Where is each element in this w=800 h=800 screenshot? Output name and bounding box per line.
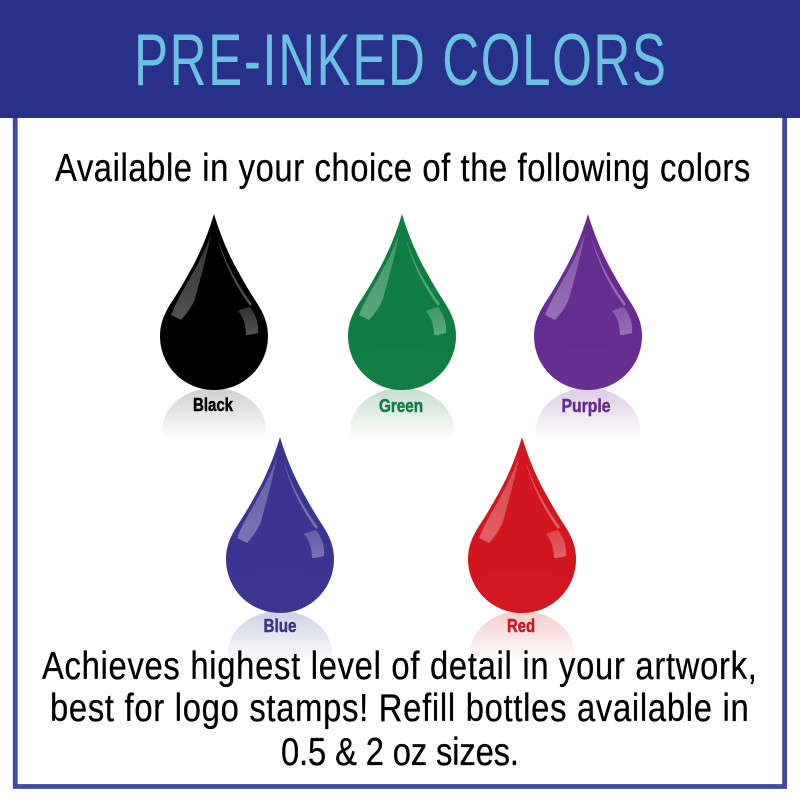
description text: Achieves highest level of detail in your artwork, <box>42 645 757 688</box>
drop: green: Green <box>379 396 423 416</box>
drop: blue <box>226 437 334 695</box>
drop: red <box>468 437 576 695</box>
title: PRE-INKED COLORS <box>134 20 666 101</box>
description text <box>42 645 757 774</box>
drop: purple <box>534 214 642 472</box>
drop: blue: Blue <box>264 616 296 636</box>
drop: green <box>348 214 456 472</box>
drop: purple: Purple <box>562 396 610 416</box>
drop: black <box>160 214 268 472</box>
description text: best for logo stamps! Refill bottles available in <box>50 687 749 730</box>
description text: 0.5 & 2 oz sizes. <box>281 731 519 774</box>
subtitle: Available in your choice of the following colors <box>55 147 750 190</box>
header band <box>0 0 800 118</box>
drop: black: Black <box>193 395 234 415</box>
drop: red: Red <box>507 616 535 636</box>
